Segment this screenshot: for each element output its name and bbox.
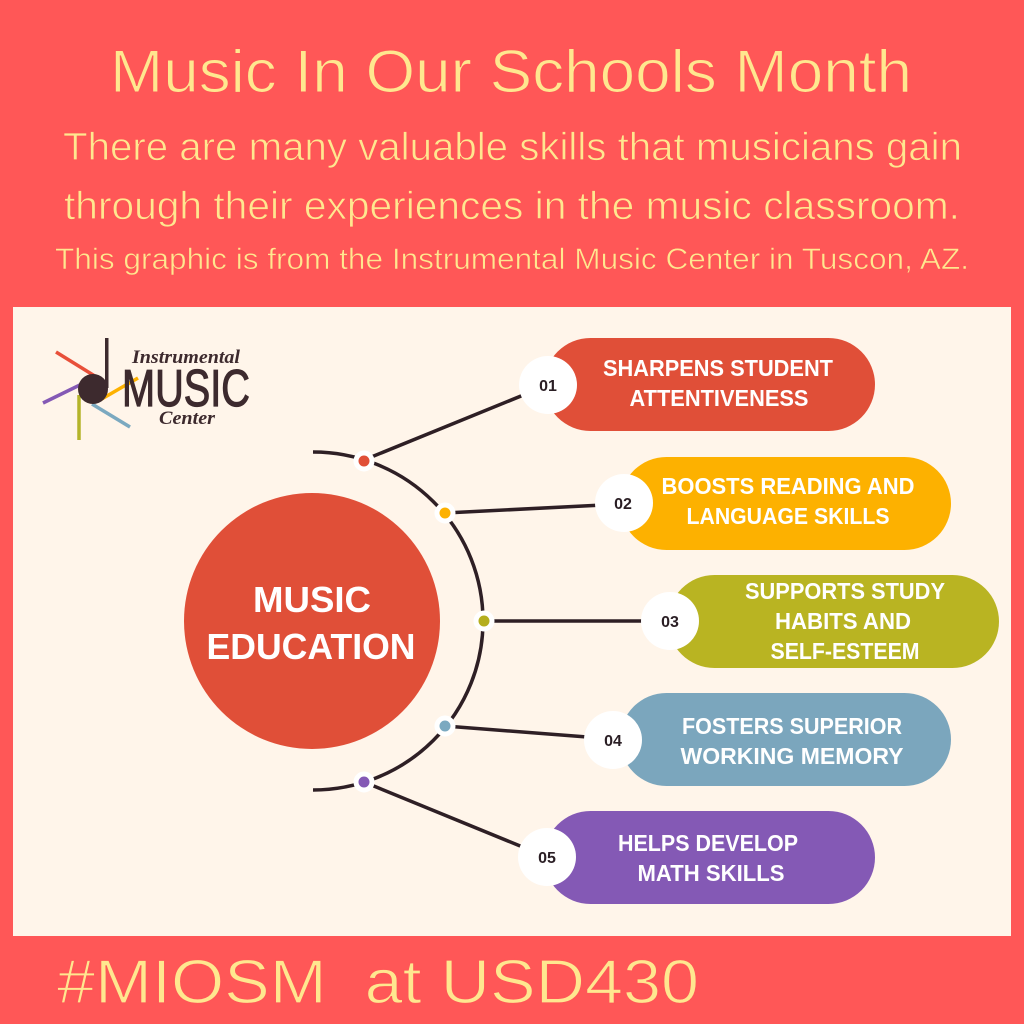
- item 05: [518, 811, 875, 904]
- central circle: EDUCATION: [206, 626, 416, 667]
- item 02: BOOSTS READING AND: [662, 473, 914, 499]
- item 04: 04: [604, 733, 622, 750]
- item 04: FOSTERS SUPERIOR: [682, 713, 902, 739]
- item 01: 01: [539, 378, 557, 395]
- central circle: MUSIC: [253, 579, 371, 620]
- item 03: [641, 575, 999, 668]
- item 02: 02: [614, 496, 632, 513]
- logo: Instrumental Music Center: MUSIC: [122, 360, 250, 418]
- connector lines: [364, 385, 670, 857]
- logo: Instrumental Music Center: Instrumental: [131, 347, 241, 368]
- central circle: [184, 493, 440, 749]
- item 01: [519, 338, 875, 431]
- logo: Instrumental Music Center: Center: [159, 408, 216, 429]
- logo: Instrumental Music Center: [43, 338, 250, 440]
- item 02: LANGUAGE SKILLS: [686, 503, 890, 529]
- item 05: HELPS DEVELOP: [618, 830, 798, 856]
- source note: This graphic is from the Instrumental Music Center in Tuscon, AZ.: [55, 243, 969, 276]
- item 03: SUPPORTS STUDY: [745, 578, 945, 604]
- item 04: WORKING MEMORY: [680, 743, 904, 769]
- item 02: [595, 457, 951, 550]
- title: Music In Our Schools Month: [110, 38, 912, 105]
- intro text: [63, 126, 962, 228]
- nodes on arc: [356, 453, 492, 790]
- intro text: through their experiences in the music classroom.: [64, 185, 960, 228]
- item 05: 05: [538, 850, 556, 867]
- item 03: SELF-ESTEEM: [770, 638, 920, 664]
- arc connector: [313, 452, 483, 790]
- intro text: There are many valuable skills that musicians gain: [63, 126, 962, 169]
- hashtag footer: #MIOSM at USD430: [57, 948, 699, 1017]
- panel: infographic: [13, 307, 1011, 936]
- item 01: SHARPENS STUDENT: [603, 355, 833, 381]
- item 05: MATH SKILLS: [638, 860, 784, 886]
- item 04: [584, 693, 951, 786]
- item 01: ATTENTIVENESS: [630, 385, 808, 411]
- item 03: 03: [661, 614, 679, 631]
- item 03: HABITS AND: [775, 608, 911, 634]
